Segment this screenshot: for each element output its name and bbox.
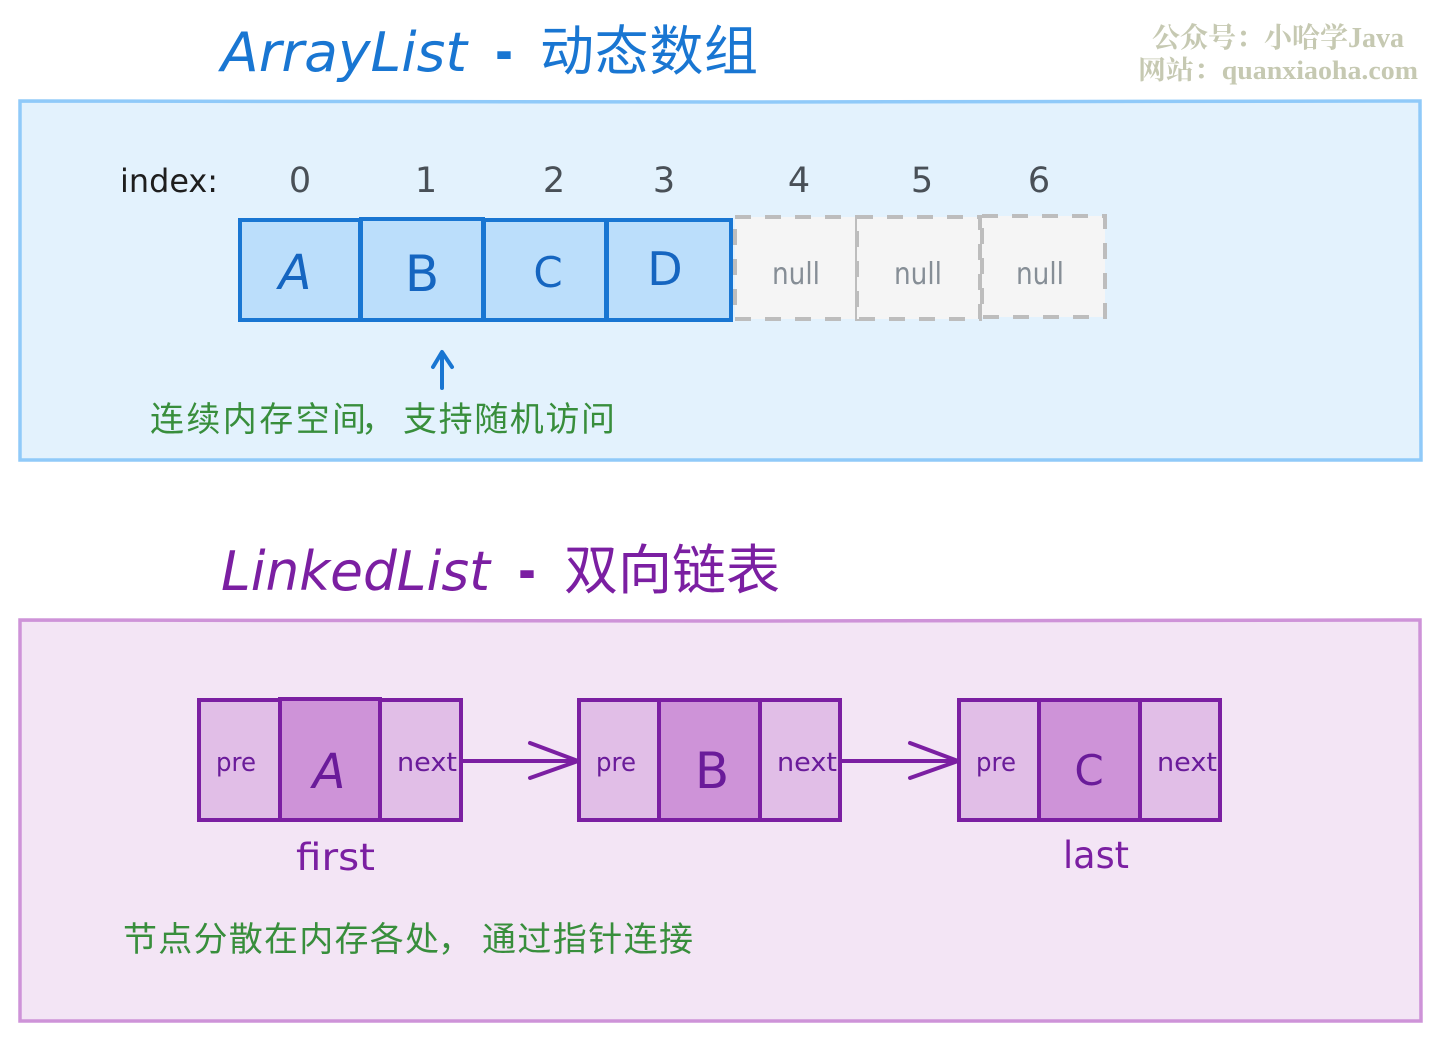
title: LinkedList: LinkedList [221, 540, 492, 603]
note: scattered nodes: 通过指针连接 [482, 921, 693, 959]
null labels: null [772, 257, 820, 292]
last label: last [1063, 834, 1129, 877]
node letters: B [695, 742, 729, 800]
node A [199, 699, 461, 820]
title: ArrayList: 动态数组 [540, 22, 758, 82]
null labels: null [1016, 257, 1064, 292]
note: contiguous memory: 支持随机访问 [403, 401, 615, 439]
watermark [1138, 22, 1418, 85]
panel background [20, 620, 1421, 1021]
index numbers: 0 [289, 161, 311, 201]
index numbers: 4 [788, 161, 810, 201]
index numbers: 6 [1028, 161, 1050, 201]
note: contiguous memory: ， [361, 401, 395, 439]
node B [579, 700, 840, 820]
cell letters: C [533, 248, 563, 297]
cell letters: A [276, 245, 311, 301]
note: contiguous memory [150, 401, 615, 439]
title: LinkedList [221, 540, 780, 603]
index numbers: 5 [911, 161, 933, 201]
pre labels [216, 748, 1016, 778]
panel: LinkedList doubly linked list [20, 620, 1421, 1021]
cell letters: D [647, 242, 683, 296]
title: LinkedList: 双向链表 [564, 541, 780, 601]
next labels: next [1157, 748, 1217, 778]
index numbers [289, 161, 1050, 201]
first label: first [296, 836, 375, 879]
node letters: A [310, 744, 345, 800]
next labels: next [397, 748, 457, 778]
cell letters [276, 242, 683, 303]
node C [959, 700, 1220, 820]
pre labels: pre [976, 748, 1016, 778]
filled array cells [240, 219, 731, 320]
watermark: 网站：quanxiaoha.com [1138, 56, 1418, 85]
node letters: C [1074, 746, 1104, 795]
title: ArrayList: ArrayList [218, 21, 469, 84]
panel background [20, 101, 1421, 460]
next labels: next [777, 748, 837, 778]
panel: ArrayList dynamic array [20, 101, 1421, 460]
node letters [310, 742, 1104, 800]
note: contiguous memory: 连续内存空间 [150, 401, 366, 439]
index label: index: [120, 162, 218, 200]
pre labels: pre [596, 748, 636, 778]
watermark: 公众号：小哈学Java [1152, 22, 1404, 54]
null labels [772, 257, 1064, 292]
note: scattered nodes [123, 921, 693, 959]
empty null cells [735, 216, 1105, 319]
index numbers: 1 [415, 161, 437, 201]
note: scattered nodes: 节点分散在内存各处 [123, 921, 439, 959]
title: ArrayList: - [495, 21, 513, 84]
arrow: node B to node C [841, 743, 958, 778]
arrow: up to array cell [433, 352, 452, 388]
index numbers: 2 [543, 161, 565, 201]
pre labels: pre [216, 748, 256, 778]
arrow: node A to node B [461, 743, 578, 778]
title: ArrayList [218, 21, 758, 84]
cell letters: B [405, 245, 439, 303]
note: scattered nodes: ， [438, 921, 472, 959]
index numbers: 3 [653, 161, 675, 201]
next labels [397, 748, 1217, 778]
title: LinkedList: - [518, 540, 536, 603]
null labels: null [894, 257, 942, 292]
